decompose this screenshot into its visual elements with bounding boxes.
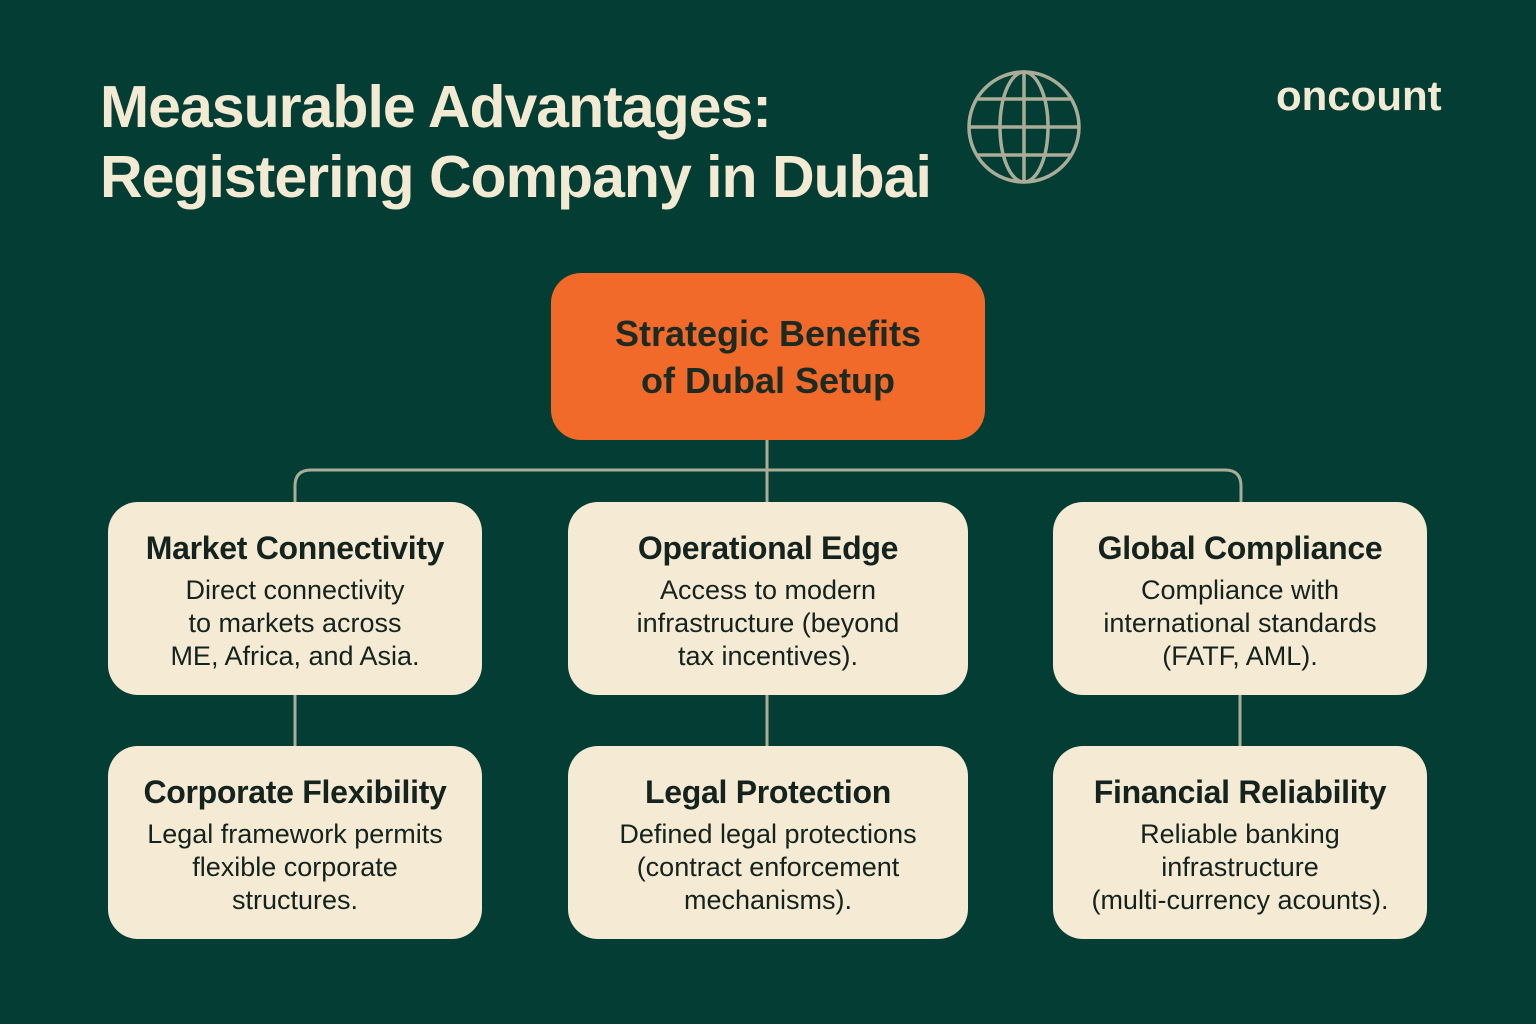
card: corporate flexibility: Corporate Flexibility xyxy=(143,774,447,810)
card: global compliance: Global Compliance xyxy=(1098,530,1382,566)
card: corporate flexibility xyxy=(108,746,482,939)
card: legal protection: mechanisms). xyxy=(684,885,852,915)
card: legal protection: Legal Protection xyxy=(645,774,891,810)
logo: oncount xyxy=(1276,72,1442,119)
card: legal protection xyxy=(568,746,968,939)
card: operational edge: Operational Edge xyxy=(638,530,898,566)
title: Registering Company in Dubai xyxy=(100,144,931,210)
card: market connectivity xyxy=(108,502,482,695)
card: global compliance: international standards xyxy=(1103,608,1377,638)
card: financial reliability: Financial Reliability xyxy=(1094,774,1386,810)
card: financial reliability: infrastructure xyxy=(1161,852,1319,882)
card: financial reliability: (multi-currency acounts). xyxy=(1091,885,1389,915)
card: legal protection: (contract enforcement xyxy=(637,852,899,882)
title: Measurable Advantages: xyxy=(100,74,771,140)
card: corporate flexibility: flexible corporate xyxy=(192,852,398,882)
card: global compliance xyxy=(1053,502,1427,695)
card: operational edge xyxy=(568,502,968,695)
card: financial reliability: Reliable banking xyxy=(1140,819,1340,849)
card: legal protection: Defined legal protections xyxy=(619,819,917,849)
card: market connectivity: Direct connectivity xyxy=(185,575,405,605)
card: corporate flexibility: Legal framework permits xyxy=(147,819,443,849)
hub: strategic benefits xyxy=(551,273,985,440)
card: market connectivity: to markets across xyxy=(188,608,402,638)
card: global compliance: (FATF, AML). xyxy=(1162,641,1318,671)
hub: strategic benefits: Strategic Benefits xyxy=(615,313,921,354)
hub: strategic benefits: of Dubal Setup xyxy=(641,360,895,401)
icon: globe xyxy=(967,70,1081,184)
card: market connectivity: Market Connectivity xyxy=(146,530,444,566)
card: corporate flexibility: structures. xyxy=(232,885,358,915)
title xyxy=(100,74,931,210)
card: operational edge: infrastructure (beyond xyxy=(637,608,899,638)
card: operational edge: Access to modern xyxy=(660,575,876,605)
card: market connectivity: ME, Africa, and Asia. xyxy=(170,641,420,671)
card: financial reliability xyxy=(1053,746,1427,939)
card: global compliance: Compliance with xyxy=(1141,575,1339,605)
card: operational edge: tax incentives). xyxy=(678,641,858,671)
